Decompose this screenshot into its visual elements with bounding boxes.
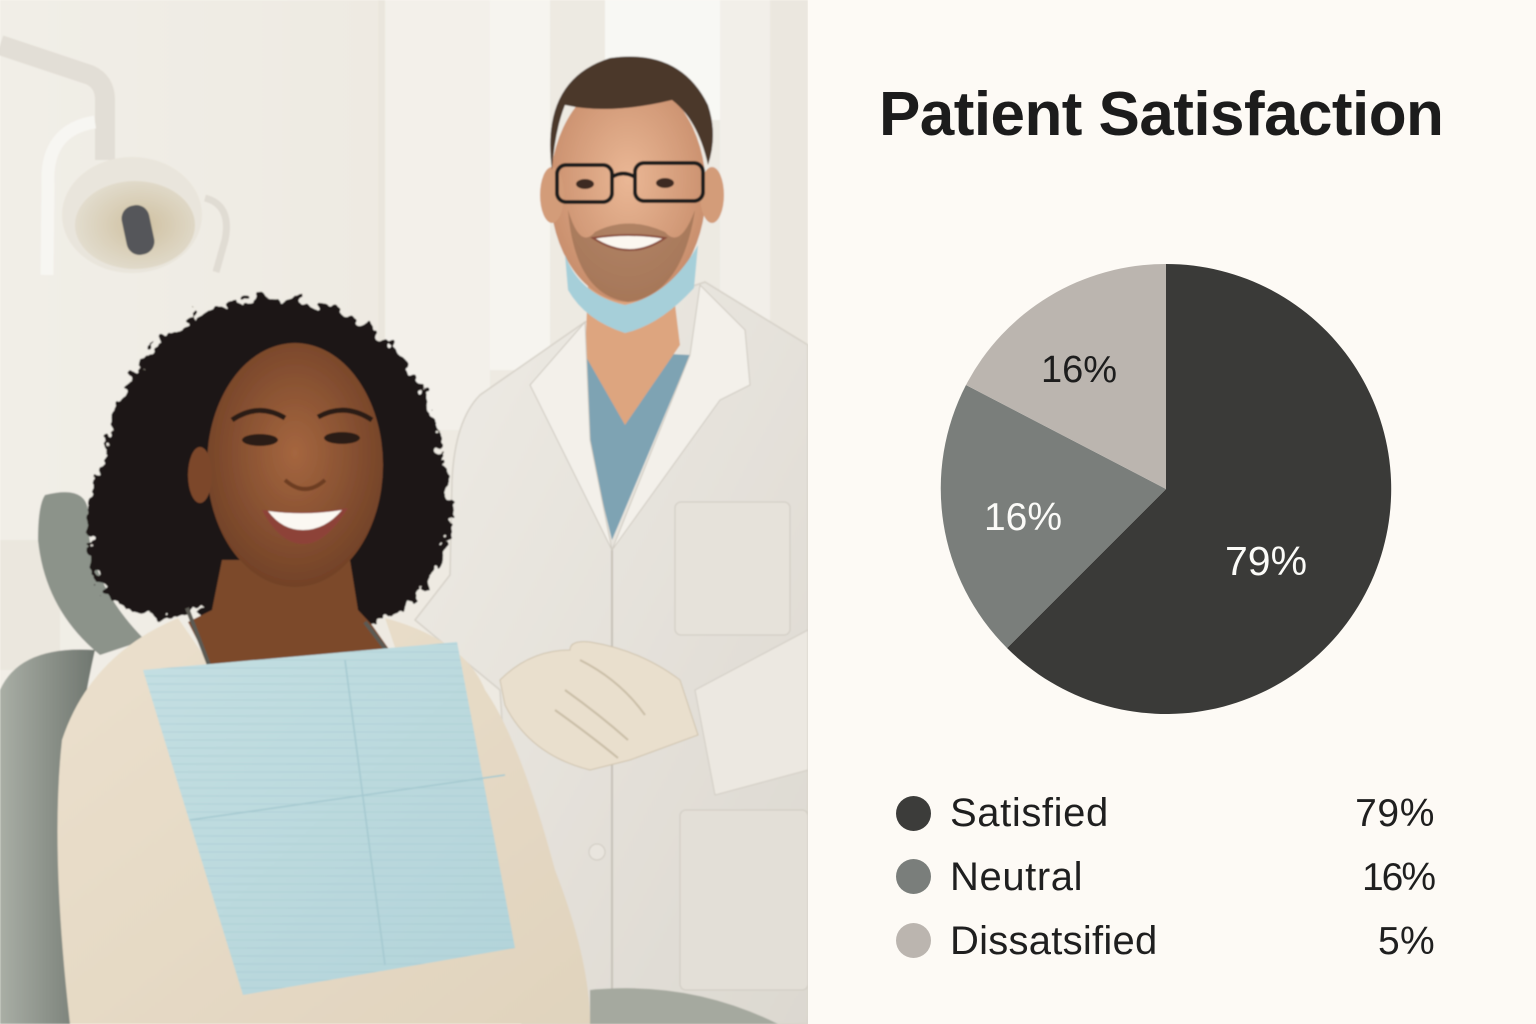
eyes and brows [242,434,278,446]
label: 16% light: 16% [1041,349,1117,391]
smile [593,235,665,250]
value: neutral: 16% [1362,856,1434,899]
slice: neutral [941,385,1166,648]
panel: patient satisfaction [808,0,1536,1024]
value: dissatisfied: 5% [1378,920,1435,963]
dental lamp [0,45,226,275]
scrubs [583,350,690,540]
mask [565,245,698,333]
hair [87,299,451,621]
bib chain [187,608,394,678]
legend row: dissatisfied [896,919,1435,963]
sweater [58,618,590,1024]
clinic wall background [0,0,808,1024]
patient [58,299,590,1024]
slice: satisfied [1007,264,1391,714]
label: 16% neutral: 16% [984,496,1062,539]
sleeve [695,630,808,795]
pie chart [940,264,1392,714]
head [550,78,706,302]
value: satisfied: 79% [1355,792,1435,835]
lab coat [415,282,808,1024]
neck [188,560,398,675]
face [207,343,383,587]
hair [550,57,713,170]
gloved hands [500,642,698,770]
photo: patient and dentist in a dental clinic [0,0,808,1024]
patient bib [143,642,515,995]
beard [568,210,695,302]
slice: dissatisfied [966,264,1166,489]
dentist [415,57,808,1024]
label: dissatisfied: Dissatsified [950,919,1158,963]
legend row: satisfied [896,791,1435,835]
legend [896,791,1435,963]
coat lapels [530,322,612,550]
label: neutral: Neutral [950,855,1083,899]
swatch: neutral [896,859,931,894]
title: Patient Satisfaction [879,80,1443,149]
nose [285,480,325,489]
swatch: dissatisfied [896,923,931,958]
label: satisfied: Satisfied [950,791,1109,835]
swatch: satisfied [896,796,931,831]
smile [262,508,348,544]
legend row: neutral [896,855,1435,899]
glasses [557,163,703,202]
neck [585,280,680,425]
label: 79%: 79% [1225,538,1307,584]
chair [0,492,778,1024]
